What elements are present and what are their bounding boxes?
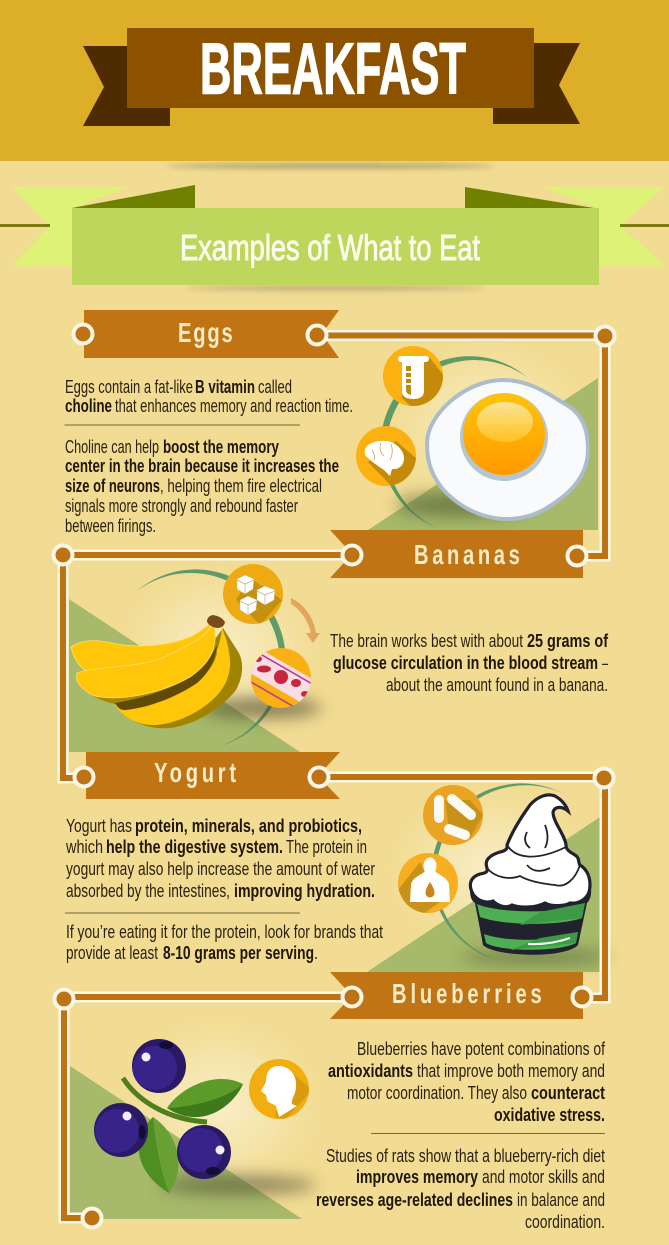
arc: [138, 1029, 269, 1197]
panel: blueberries: [70, 972, 606, 1232]
text block: eggs: called: [258, 377, 292, 397]
panel: bananas: [69, 530, 609, 752]
text block: yogurt: absorbed by the intestines,: [66, 881, 230, 901]
text block: eggs: Choline can help: [65, 437, 159, 457]
label: Blueberries: [392, 979, 542, 1010]
icon: hydrated body: [398, 853, 458, 913]
icon: head: [249, 1059, 312, 1120]
title: BREAKFAST: [200, 30, 466, 110]
text block: yogurt: yogurt may also help increase the amount of water: [66, 859, 375, 879]
subtitle: Examples of What to Eat: [180, 227, 480, 268]
label: Eggs: [178, 318, 233, 349]
text block: blueberries: antioxidants: [328, 1061, 413, 1081]
middle banana: [77, 623, 215, 698]
text block: yogurt: improving hydration.: [234, 881, 375, 901]
text block: eggs: choline: [65, 396, 112, 416]
text block: yogurt: provide at least: [66, 943, 158, 963]
text block: eggs: size of neurons: [65, 476, 160, 496]
icon: brain: [356, 426, 416, 486]
dark band: [115, 645, 217, 710]
glow: [375, 330, 605, 530]
text block: bananas: –: [602, 653, 608, 673]
label: Bananas: [414, 540, 520, 571]
text block: yogurt: [65, 816, 383, 963]
icon: test tube: [383, 346, 443, 406]
dark outer side: [115, 628, 242, 728]
text block: eggs: [64, 377, 353, 536]
text block: eggs: between firings.: [65, 516, 156, 536]
subtitle ribbon: [0, 185, 669, 290]
arrow: [291, 598, 320, 643]
text block: blueberries: [316, 1039, 606, 1232]
green triangle: [368, 378, 598, 530]
heading: eggs ribbon: [84, 310, 339, 358]
text block: blueberries: Blueberries have potent combinations of: [357, 1039, 606, 1059]
glow: [105, 555, 335, 745]
illustration: bananas: [71, 615, 242, 728]
front banana: [115, 628, 230, 725]
title ribbon: [83, 28, 580, 126]
green triangle: [69, 599, 300, 752]
green triangle: [367, 817, 600, 972]
text block: blueberries: in balance and: [517, 1190, 605, 1210]
arc: [381, 356, 528, 528]
text block: eggs: Eggs contain a fat-like: [65, 377, 193, 397]
egg shadow: [395, 493, 525, 517]
text block: yogurt: Yogurt has: [66, 816, 132, 836]
illustration: blueberries: [94, 1039, 243, 1193]
glow: [105, 1005, 335, 1205]
text block: eggs: center in the brain because it increases the: [65, 456, 339, 476]
arc: [432, 783, 562, 960]
text block: blueberries: oxidative stress.: [494, 1105, 605, 1125]
text block: blueberries: and motor skills and: [482, 1167, 605, 1187]
text block: yogurt: which: [65, 837, 103, 857]
text block: eggs: boost the memory: [163, 437, 279, 457]
panel: eggs: [64, 310, 605, 536]
banana shadow: [202, 698, 322, 718]
connector nodes: [54, 324, 614, 1228]
text block: yogurt: 8-10 grams per serving: [163, 943, 314, 963]
yogurt shadow: [460, 950, 610, 964]
text block: blueberries: improves memory: [356, 1167, 478, 1187]
text block: blueberries: that improve both memory and: [417, 1061, 605, 1081]
text block: blueberries: coordination.: [525, 1212, 605, 1232]
text block: bananas: The brain works best with about: [330, 631, 523, 651]
glow: [375, 775, 605, 965]
text block: blueberries: counteract: [531, 1083, 605, 1103]
text block: bananas: 25 grams of: [527, 631, 609, 651]
heading: yogurt ribbon: [86, 752, 340, 799]
illustration: fried egg: [427, 380, 588, 519]
back banana: [71, 623, 214, 680]
text block: blueberries: reverses age-related declines: [316, 1190, 513, 1210]
panel: yogurt: [65, 752, 610, 972]
text block: eggs: B vitamin: [195, 377, 255, 397]
text block: blueberries: motor coordination. They also: [347, 1083, 527, 1103]
heading: blueberries ribbon: [330, 972, 583, 1019]
text block: yogurt: The protein in: [286, 837, 367, 857]
text block: eggs: signals more strongly and rebound faster: [65, 496, 298, 516]
green triangle: [70, 1066, 302, 1219]
text block: yogurt: If you’re eating it for the protein, look for brands that: [66, 922, 383, 942]
berry shadow: [160, 1176, 316, 1194]
text block: yogurt: help the digestive system.: [106, 837, 283, 857]
text block: eggs: that enhances memory and reaction time.: [115, 396, 353, 416]
icon: probiotics: [423, 785, 483, 845]
text block: eggs: , helping them fire electrical: [160, 476, 322, 496]
text block: bananas: glucose circulation in the blood stream: [333, 653, 598, 673]
text block: bananas: [330, 631, 609, 695]
icon: sugar cubes: [223, 564, 283, 625]
header band: [0, 0, 669, 168]
heading: bananas ribbon: [330, 530, 583, 578]
text block: yogurt: .: [314, 943, 318, 963]
arc: [137, 569, 285, 746]
label: Yogurt: [154, 758, 236, 789]
text block: yogurt: protein, minerals, and probiotics,: [135, 816, 362, 836]
middle banana underside: [83, 632, 217, 704]
stem: [207, 615, 225, 628]
connector lines: [63, 336, 605, 1218]
icon: blood vessel: [251, 648, 311, 708]
header shadow: [165, 164, 495, 168]
illustration: yogurt cup: [470, 795, 591, 955]
